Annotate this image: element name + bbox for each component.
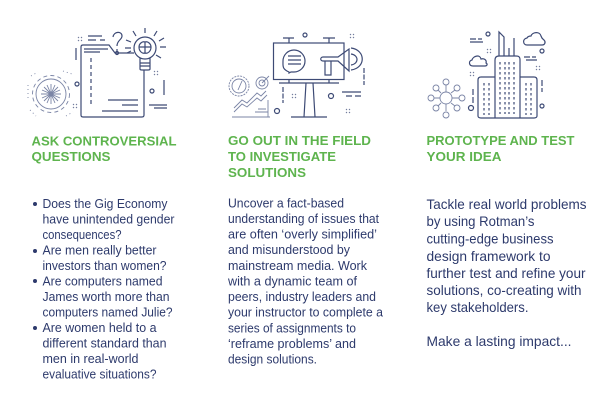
bulleted questions (33, 196, 175, 382)
body text: series of assignments to (228, 320, 356, 336)
body text: further test and refine your (426, 265, 586, 281)
heading: PROTOTYPE AND TEST (426, 133, 575, 148)
body text: Uncover a fact-based (228, 196, 344, 210)
body text: design framework to (426, 248, 551, 264)
body text: by using Rotman’s (426, 213, 534, 229)
panel: ask controversial questions (28, 28, 177, 382)
body text: Tackle real world problems (426, 196, 586, 212)
body text: Make a lasting impact... (426, 333, 572, 349)
bulleted questions: Are men really better (42, 242, 157, 258)
bulleted questions: Does the Gig Economy (42, 196, 168, 211)
icon: gauge and chart (229, 76, 270, 117)
body text: ‘reframe problems’ and (228, 336, 356, 351)
body text: with a dynamic team of (227, 274, 357, 288)
icon: city skyline and network (428, 32, 545, 118)
bulleted questions: investors than women? (42, 258, 166, 273)
icon: folder, light bulb and gear (28, 28, 167, 117)
body text (227, 196, 384, 366)
panel: prototype and test (426, 32, 586, 349)
heading: SOLUTIONS (228, 165, 306, 180)
heading: ASK CONTROVERSIAL (32, 134, 177, 148)
icon: billboard, megaphone and charts (229, 33, 364, 117)
body text (426, 196, 586, 349)
heading: TO INVESTIGATE (228, 149, 336, 164)
bulleted questions: consequences? (42, 227, 122, 242)
body text: mainstream media. Work (228, 258, 367, 273)
heading: GO OUT IN THE FIELD (228, 133, 371, 148)
bulleted questions: have unintended gender (42, 212, 175, 226)
heading (32, 134, 177, 164)
bulleted questions: James worth more than (42, 289, 170, 304)
icon: network (428, 79, 465, 118)
body text: are often ‘overly simplified’ (228, 226, 377, 242)
bulleted questions: computers named Julie? (42, 304, 172, 320)
heading: YOUR IDEA (426, 149, 502, 164)
bulleted questions: different standard than (42, 336, 166, 350)
body text: peers, industry leaders and (228, 289, 376, 304)
heading (228, 133, 371, 180)
bulleted questions: men in real-world (42, 351, 138, 366)
body text: design solutions. (228, 352, 317, 366)
body text: key stakeholders. (426, 299, 528, 315)
panel: go out in the field (227, 33, 384, 366)
body text: your instructor to complete a (228, 304, 384, 320)
body text: solutions, co-creating with (426, 282, 582, 298)
icon: gear (28, 71, 73, 116)
heading (426, 133, 575, 164)
body text: cutting-edge business (426, 230, 554, 246)
body text: and misunderstood by (228, 242, 350, 257)
heading: QUESTIONS (32, 149, 111, 164)
body text: understanding of issues that (228, 211, 379, 226)
bulleted questions: Are women held to a (42, 320, 157, 335)
bulleted questions: Are computers named (42, 274, 162, 288)
bulleted questions: evaluative situations? (42, 366, 156, 382)
